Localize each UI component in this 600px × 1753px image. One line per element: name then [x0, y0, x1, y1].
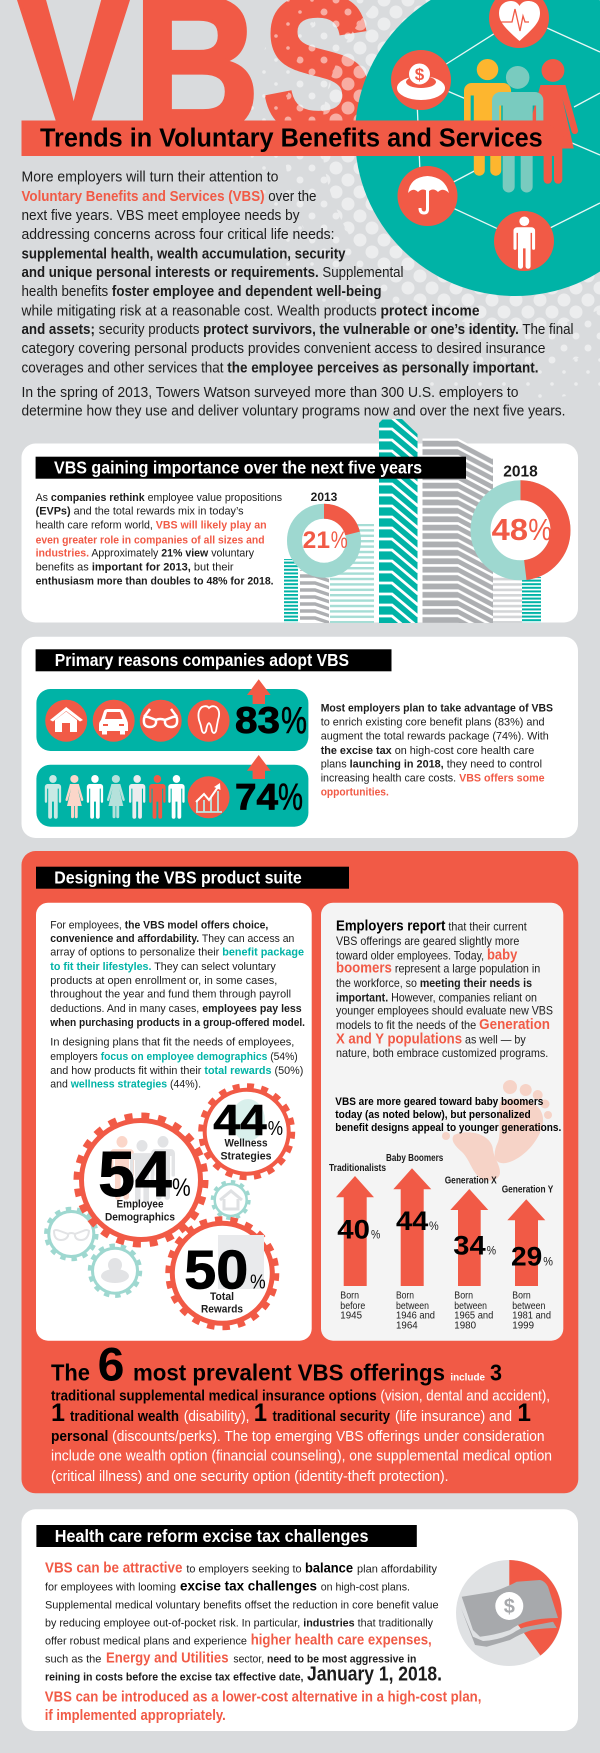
- excise text: such as the: [45, 1654, 101, 1666]
- six offerings text: [51, 1338, 552, 1485]
- value 74%: [235, 776, 303, 818]
- donut chart 2018: %: [528, 512, 552, 547]
- intro text: More employers will turn their attention to: [22, 170, 278, 186]
- six offerings text: include one wealth option (financial counseling), one supplemental medical option: [51, 1449, 552, 1465]
- excise text: January 1, 2018.: [307, 1664, 442, 1686]
- people row: [45, 775, 185, 819]
- bar: 83 percent: [36, 679, 308, 751]
- gear: 44 percent wellness strategies: 44: [213, 1096, 267, 1145]
- gear: 50 percent total rewards: %: [250, 1271, 266, 1293]
- arrow: generation Y 29 percent: between: [512, 1301, 545, 1312]
- employee text: employers focus on employee demographics (54%): [50, 1051, 298, 1063]
- body text: the excise tax on high-cost core health care: [321, 745, 534, 757]
- employer text: models to fit the needs of the Generation: [336, 1017, 550, 1033]
- excise text: by reducing employee out-of-pocket risk. In particular, industries that traditionally: [45, 1618, 433, 1630]
- arrow up: [247, 679, 271, 704]
- excise text: balance: [305, 1560, 353, 1576]
- icon: person: [494, 211, 554, 271]
- body text: opportunities.: [321, 787, 389, 799]
- icon: tooth: [188, 700, 230, 742]
- body text: (EVPs) and the total rewards mix in today’s: [36, 506, 244, 518]
- employee text: products at open enrollment or, in some cases,: [50, 975, 277, 987]
- six offerings text: 1: [51, 1399, 65, 1427]
- heading bar: Primary reasons companies adopt VBS: [55, 650, 349, 670]
- icon: nest egg: $: [415, 65, 425, 84]
- value 74%: %: [278, 776, 303, 818]
- title banner: [22, 120, 572, 156]
- employee text: and wellness strategies (44%).: [50, 1079, 201, 1091]
- body text: enthusiasm more than doubles to 48% for 2018.: [36, 575, 274, 587]
- excise text: higher health care expenses,: [251, 1633, 432, 1649]
- arrow: traditionalists 40 percent: Born: [340, 1290, 359, 1301]
- bold chart intro: VBS are more geared toward baby boomers: [335, 1096, 543, 1108]
- body text: [36, 492, 282, 587]
- arrow: baby boomers 44 percent: Born: [396, 1290, 414, 1301]
- intro text: and unique personal interests or requirements. Supplemental: [22, 265, 404, 281]
- donut chart 2018: 2018: [503, 464, 538, 481]
- gear: 50 percent total rewards: Rewards: [201, 1304, 243, 1316]
- icon: glasses: [140, 700, 182, 742]
- excise text: sector, need to be most aggressive in: [233, 1654, 417, 1666]
- skyline buildings: [284, 419, 541, 623]
- employer text: X and Y populations as well — by: [336, 1031, 526, 1047]
- employee text: and how products fit within their total rewards (50%): [50, 1065, 304, 1077]
- arrow: generation X 34 percent: Born: [454, 1290, 473, 1301]
- intro text: Voluntary Benefits and Services (VBS) over the: [22, 189, 316, 205]
- arrow: traditionalists 40 percent: before: [340, 1301, 366, 1312]
- heading bar: Health care reform excise tax challenges: [55, 1526, 369, 1546]
- arrow: generation X 34 percent: 1965 and: [454, 1311, 493, 1322]
- value 83%: %: [281, 700, 307, 742]
- value 74%: 74: [235, 776, 278, 818]
- three employees group: [464, 59, 578, 192]
- six offerings text: (disability),: [184, 1409, 250, 1425]
- icon: chart: [188, 776, 230, 818]
- heading bar: Designing the VBS product suite: [54, 867, 302, 887]
- employee text: [49, 919, 305, 1091]
- six offerings text: 6: [98, 1338, 124, 1391]
- icon: pie with dollar bill: [456, 1560, 562, 1666]
- arrow: traditionalists 40 percent: %: [371, 1227, 381, 1241]
- body text: health care reform world, VBS will likely play an: [36, 520, 267, 532]
- heading bar: VBS gaining importance over the next five years: [54, 457, 422, 477]
- intro text: In the spring of 2013, Towers Watson surveyed more than 300 U.S. employers to: [22, 385, 518, 401]
- gear: 44 percent wellness strategies: %: [268, 1118, 283, 1140]
- six offerings text: traditional security: [272, 1409, 390, 1425]
- gear: 44 percent wellness strategies: Wellness: [224, 1138, 268, 1150]
- employer text: toward older employees. Today, baby: [336, 947, 517, 963]
- excise text: Energy and Utilities: [106, 1651, 228, 1667]
- six offerings text: personal (discounts/perks). The top emerging VBS offerings under consideration: [51, 1429, 545, 1445]
- title: Trends in Voluntary Benefits and Services: [40, 125, 543, 153]
- intro text: health benefits foster employee and dependent well-being: [22, 284, 382, 300]
- donut chart 2013: [294, 490, 354, 570]
- body text: to enrich existing core benefit plans (83%) and: [321, 716, 545, 728]
- icon: umbrella: [398, 166, 458, 226]
- excise text: to employers seeking to: [186, 1564, 302, 1576]
- six offerings text: traditional wealth: [70, 1409, 179, 1425]
- arrow: generation Y 29 percent: 29: [511, 1241, 542, 1271]
- arrow: baby boomers 44 percent: 1946 and: [396, 1311, 435, 1322]
- giant VBS letters: [17, 0, 374, 174]
- employee text: when purchasing products in a group-offered model.: [49, 1017, 305, 1029]
- intro text: category covering personal products provides convenient access to desired insurance: [22, 341, 546, 357]
- six offerings text: 1: [517, 1399, 531, 1427]
- arrow: traditionalists 40 percent: Traditionalists: [329, 1163, 386, 1174]
- arrow: traditionalists 40 percent: 40: [337, 1214, 370, 1244]
- gear: 44 percent wellness strategies: Strategies: [220, 1150, 272, 1162]
- excise text: excise tax challenges: [180, 1578, 317, 1594]
- employer text: nature, both embrace customized programs.: [336, 1046, 548, 1060]
- arrow: generation Y 29 percent: Generation Y: [502, 1185, 554, 1196]
- employee text: throughout the year and fund them through payroll: [50, 989, 291, 1001]
- small gear: nest egg: [90, 1245, 140, 1296]
- intro text: and assets; security products protect survivors, the vulnerable or one’s identity. The final: [22, 322, 574, 338]
- gear: 54 percent employee demographics: [76, 1116, 206, 1244]
- six offerings text: traditional supplemental medical insurance options (vision, dental and accident),: [51, 1389, 550, 1405]
- employer text: important. However, companies reliant on: [336, 990, 537, 1004]
- arrow: generation X 34 percent: Generation X: [445, 1176, 497, 1187]
- icon: heart: [489, 0, 549, 48]
- intro text: next five years. VBS meet employee needs by: [22, 208, 300, 224]
- arrow: generation Y 29 percent: 1999: [512, 1321, 534, 1332]
- arrow: generation X 34 percent: between: [454, 1301, 487, 1312]
- arrow: traditionalists 40 percent: 1945: [340, 1311, 362, 1322]
- six offerings text: include: [450, 1373, 485, 1384]
- value 83%: [235, 700, 307, 742]
- employee text: In designing plans that fit the needs of employees,: [50, 1037, 294, 1049]
- gear: 44 percent wellness strategies: [201, 1086, 293, 1178]
- six offerings text: 1: [254, 1399, 267, 1427]
- panel: excise tax challenges: [22, 1509, 578, 1731]
- employer text: the workforce, so meeting their needs is: [336, 976, 532, 990]
- arrow: baby boomers 44 percent: %: [429, 1219, 439, 1233]
- body text: [321, 703, 554, 799]
- employee text: deductions. And in many cases, employees pay less: [50, 1003, 302, 1015]
- icon: car: [93, 700, 135, 742]
- panel: primary reasons: [22, 637, 578, 838]
- employer text: younger employees should evaluate new VBS: [336, 1004, 553, 1018]
- body text: even greater role in companies of all sizes and: [36, 534, 265, 546]
- employee text: array of options to personalize their benefit package: [50, 947, 304, 959]
- panel: employees: [36, 903, 312, 1341]
- employer text: Employers report that their current: [336, 919, 527, 935]
- donut chart 2013: 2013: [311, 490, 338, 504]
- excise text: VBS can be introduced as a lower-cost alternative in a high-cost plan,: [45, 1690, 481, 1706]
- donut chart 2018: 48: [492, 512, 528, 547]
- intro text: determine how they use and deliver voluntary programs now and over the next five years.: [22, 404, 566, 420]
- panel: employers: [321, 903, 563, 1341]
- icon: nest egg: [391, 50, 451, 110]
- body text: increasing health care costs. VBS offers some: [321, 773, 545, 785]
- excise text: plan affordability: [357, 1564, 438, 1576]
- arrow: baby boomers 44 percent: 44: [396, 1206, 428, 1236]
- arrow: generation Y 29 percent: Born: [512, 1290, 531, 1301]
- excise text: on high-cost plans.: [321, 1582, 410, 1594]
- body text: augment the total rewards package (74%). With: [321, 731, 549, 743]
- arrow: generation Y 29 percent: %: [543, 1254, 553, 1268]
- arrow: baby boomers 44 percent: 1964: [396, 1321, 418, 1332]
- excise text: offer robust medical plans and experience: [45, 1636, 247, 1648]
- donut chart 2013: 21: [303, 527, 330, 554]
- body text: benefits as important for 2013, but their: [36, 562, 234, 574]
- employer text: VBS offerings are geared slightly more: [336, 934, 520, 948]
- employer text: boomers represent a large population in: [336, 961, 540, 977]
- employee text: convenience and affordability. They can access an: [50, 933, 294, 945]
- excise text: VBS can be attractive: [45, 1561, 182, 1577]
- six offerings text: 3: [490, 1360, 502, 1386]
- six offerings text: most prevalent VBS offerings: [133, 1360, 445, 1386]
- arrow: baby boomers 44 percent: [386, 1153, 444, 1332]
- bold chart intro: benefit designs appeal to younger generations.: [335, 1122, 561, 1134]
- intro text: while mitigating risk at a reasonable cost. Wealth products protect income: [21, 303, 480, 319]
- arrow: generation X 34 percent: 34: [453, 1230, 486, 1260]
- excise text: for employees with looming: [45, 1582, 176, 1594]
- employer text: [336, 919, 553, 1060]
- excise text: [45, 1560, 481, 1724]
- body text: As companies rethink employee value propositions: [36, 492, 282, 504]
- intro text: [21, 170, 574, 420]
- excise text: Supplemental medical voluntary benefits offset the reduction in core benefit value: [45, 1600, 439, 1612]
- six offerings text: (critical illness) and one security option (identity-theft protection).: [51, 1469, 448, 1485]
- gear: 54 percent employee demographics: Demographics: [105, 1211, 175, 1223]
- gear: 54 percent employee demographics: %: [172, 1174, 191, 1202]
- bold chart intro: [335, 1096, 561, 1134]
- six offerings text: The: [51, 1360, 90, 1386]
- excise text: reining in costs before the excise tax effective date,: [45, 1672, 304, 1684]
- teal circle: [355, 0, 600, 296]
- donut chart 2013: %: [331, 527, 348, 554]
- body text: plans launching in 2018, they need to control: [321, 758, 542, 770]
- panel: VBS gaining importance: [22, 419, 578, 623]
- arrow: generation X 34 percent: [445, 1176, 497, 1332]
- arrow: traditionalists 40 percent: [329, 1163, 386, 1322]
- intro text: supplemental health, wealth accumulation, security: [22, 246, 346, 262]
- value 83%: 83: [235, 700, 280, 741]
- arrow: baby boomers 44 percent: Baby Boomers: [386, 1153, 444, 1164]
- arrow: generation Y 29 percent: [502, 1185, 554, 1332]
- icon: footprints: [442, 1080, 552, 1180]
- gear: 50 percent total rewards: [168, 1219, 277, 1328]
- employee text: to fit their lifestyles. They can select voluntary: [50, 961, 276, 973]
- intro text: addressing concerns across four critical life needs:: [22, 227, 334, 243]
- six offerings text: (life insurance) and: [395, 1409, 512, 1425]
- gear: 50 percent total rewards: 50: [184, 1238, 248, 1300]
- halftone dot field: [267, 0, 600, 384]
- small gear: home: [212, 1182, 249, 1218]
- icon: house: [45, 700, 87, 742]
- body text: Most employers plan to take advantage of VBS: [321, 703, 554, 715]
- arrow chart by generation: [329, 1153, 554, 1332]
- network lines: [417, 18, 600, 241]
- bar: 74 percent: [36, 755, 308, 827]
- arrow up: [247, 755, 271, 779]
- panel: designing the VBS product suite: [22, 851, 578, 1493]
- donut chart 2018: [480, 464, 560, 570]
- gear: 50 percent total rewards: Total: [210, 1291, 234, 1303]
- body text: industries. Approximately 21% view voluntary: [36, 548, 254, 560]
- gear: 54 percent employee demographics: 54: [98, 1138, 172, 1210]
- employee text: For employees, the VBS model offers choice,: [50, 919, 268, 931]
- header illustration: [17, 0, 600, 384]
- bold chart intro: today (as noted below), but personalized: [335, 1109, 531, 1121]
- small gear: glasses: [46, 1208, 97, 1260]
- arrow: baby boomers 44 percent: between: [396, 1301, 429, 1312]
- gear: 54 percent employee demographics: Employee: [116, 1199, 164, 1211]
- arrow: generation X 34 percent: 1980: [454, 1321, 476, 1332]
- intro text: coverages and other services that the employee perceives as personally important.: [22, 360, 538, 376]
- arrow: generation X 34 percent: %: [487, 1243, 496, 1257]
- icon: pie with dollar bill: $: [504, 1596, 515, 1618]
- arrow: generation Y 29 percent: 1981 and: [512, 1311, 551, 1322]
- excise text: if implemented appropriately.: [45, 1708, 226, 1724]
